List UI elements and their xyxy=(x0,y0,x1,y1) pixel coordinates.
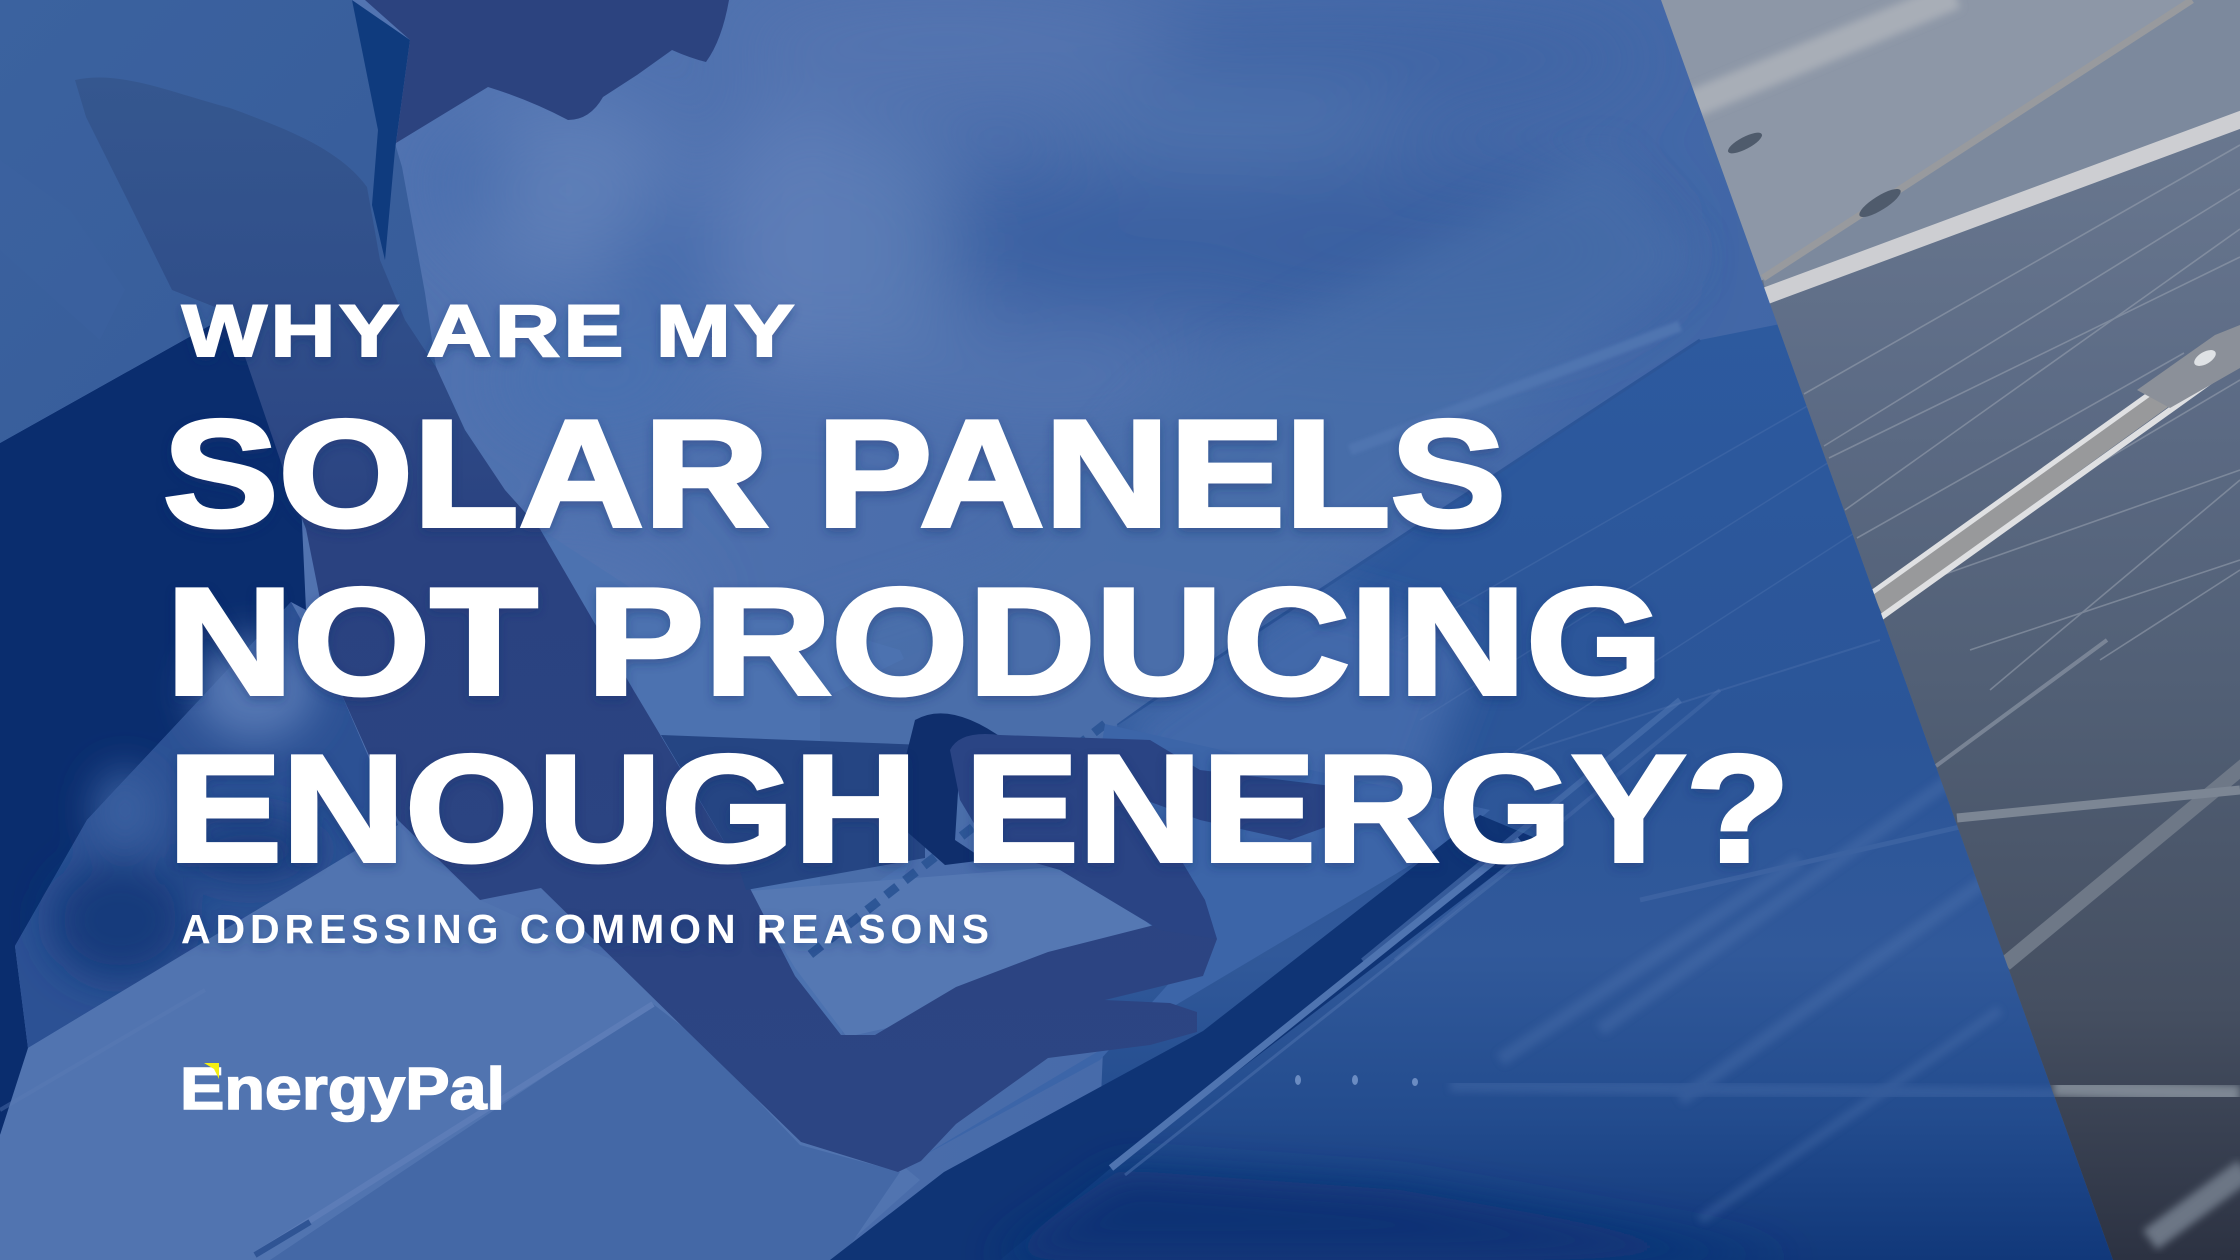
darker striped panel xyxy=(270,1004,900,1260)
cell grid lines xyxy=(1804,145,2240,766)
panel surface below the sky xyxy=(1000,324,2113,1260)
neck and jaw xyxy=(365,0,729,143)
collar xyxy=(352,0,410,260)
heading: not producing: NOT PRODUCING xyxy=(166,557,1663,727)
shirt xyxy=(0,0,436,442)
logo: EnergyPal: EnergyPal xyxy=(180,1056,505,1122)
paper plans on the panel xyxy=(749,865,1168,1037)
bright reflection streak xyxy=(1690,0,1955,105)
blurred cloud wedge left of arm xyxy=(15,602,398,1048)
lower panel bars xyxy=(1957,765,2240,1240)
bottom shadow xyxy=(1024,1161,1669,1260)
frame strip by the plans xyxy=(921,724,1490,1157)
forearm xyxy=(661,735,925,890)
white frame bar xyxy=(1760,118,2240,298)
wristwatch xyxy=(905,713,1005,865)
photo background: right side unfiltered solar panels xyxy=(1650,0,2240,1260)
dashed rail above the plans xyxy=(807,724,1105,957)
main rail xyxy=(1873,381,2204,614)
light panel band xyxy=(1359,202,1620,320)
panel frame xyxy=(1763,0,2192,278)
fixing dots xyxy=(1295,1075,1418,1086)
lighter zone of lower panel xyxy=(1122,590,1470,790)
light streak on panels xyxy=(1350,326,1680,450)
dark gutter under the hand xyxy=(830,815,1540,1260)
left dark foreground xyxy=(0,313,306,1135)
pale streaks on lower frame xyxy=(1111,690,1720,1175)
frame slots xyxy=(1725,129,1904,222)
upper arm xyxy=(75,77,1217,1172)
panel rail xyxy=(255,1004,653,1255)
icon: yellow corner tick xyxy=(204,1063,219,1079)
subheading: ADDRESSING COMMON REASONS xyxy=(181,906,989,952)
light sky-reflecting panel, top xyxy=(1661,0,2192,300)
upper hand xyxy=(950,734,1345,939)
rail clamp xyxy=(2137,325,2240,408)
solar panel lower left xyxy=(0,853,918,1184)
heading: enough energy: ENOUGH ENERGY? xyxy=(168,724,1790,894)
panel surface behind arm xyxy=(575,589,592,617)
dark frame line across the panels xyxy=(1117,340,1700,724)
faint panel grid lines xyxy=(1440,406,2054,1222)
shaded sleeve crease xyxy=(0,160,125,340)
heading: solar panels: SOLAR PANELS xyxy=(163,389,1506,559)
heading: why are my: WHY ARE MY xyxy=(182,291,798,372)
